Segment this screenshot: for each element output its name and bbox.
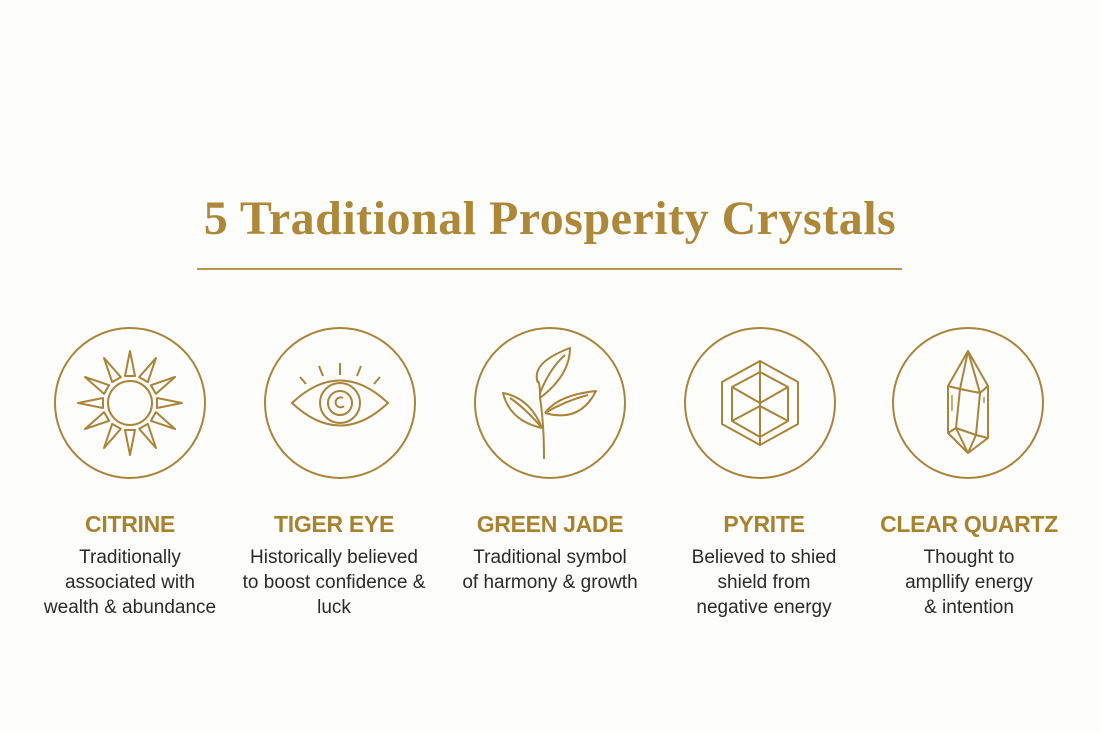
item: clear quartz: CLEAR QUARTZ xyxy=(880,511,1058,537)
title: 5 Traditional Prosperity Crystals xyxy=(204,192,896,245)
item: citrine: CITRINE xyxy=(85,511,175,537)
item: pyrite: negative energy xyxy=(696,597,832,618)
item: green jade: GREEN JADE xyxy=(477,511,623,537)
icon: citrine sun xyxy=(55,328,205,478)
item: pyrite: shield from xyxy=(718,572,810,593)
item: clear quartz: ampllify energy xyxy=(905,572,1033,593)
item: green jade xyxy=(462,511,638,593)
item: clear quartz: & intention xyxy=(924,597,1014,618)
item: pyrite xyxy=(692,511,836,618)
item: clear quartz: Thought to xyxy=(924,547,1014,568)
item: citrine: Traditionally xyxy=(79,547,181,568)
item: tiger eye xyxy=(242,511,426,618)
icon: green jade leaf xyxy=(475,328,625,478)
icon: clear quartz xyxy=(893,328,1043,478)
icon: tiger eye xyxy=(265,328,415,478)
item: green jade: Traditional symbol xyxy=(473,547,627,568)
item: tiger eye: Historically believed xyxy=(250,547,418,568)
item: tiger eye: to boost confidence & xyxy=(243,572,425,593)
item: green jade: of harmony & growth xyxy=(462,572,638,593)
item: pyrite: Believed to shied xyxy=(692,547,836,568)
item: tiger eye: luck xyxy=(317,597,351,618)
item: citrine xyxy=(44,511,216,618)
item: clear quartz xyxy=(880,511,1058,618)
item: pyrite: PYRITE xyxy=(723,511,805,537)
item: citrine: associated with xyxy=(65,572,195,593)
item: citrine: wealth & abundance xyxy=(44,597,216,618)
item: tiger eye: TIGER EYE xyxy=(274,511,394,537)
icon: pyrite cube xyxy=(685,328,835,478)
